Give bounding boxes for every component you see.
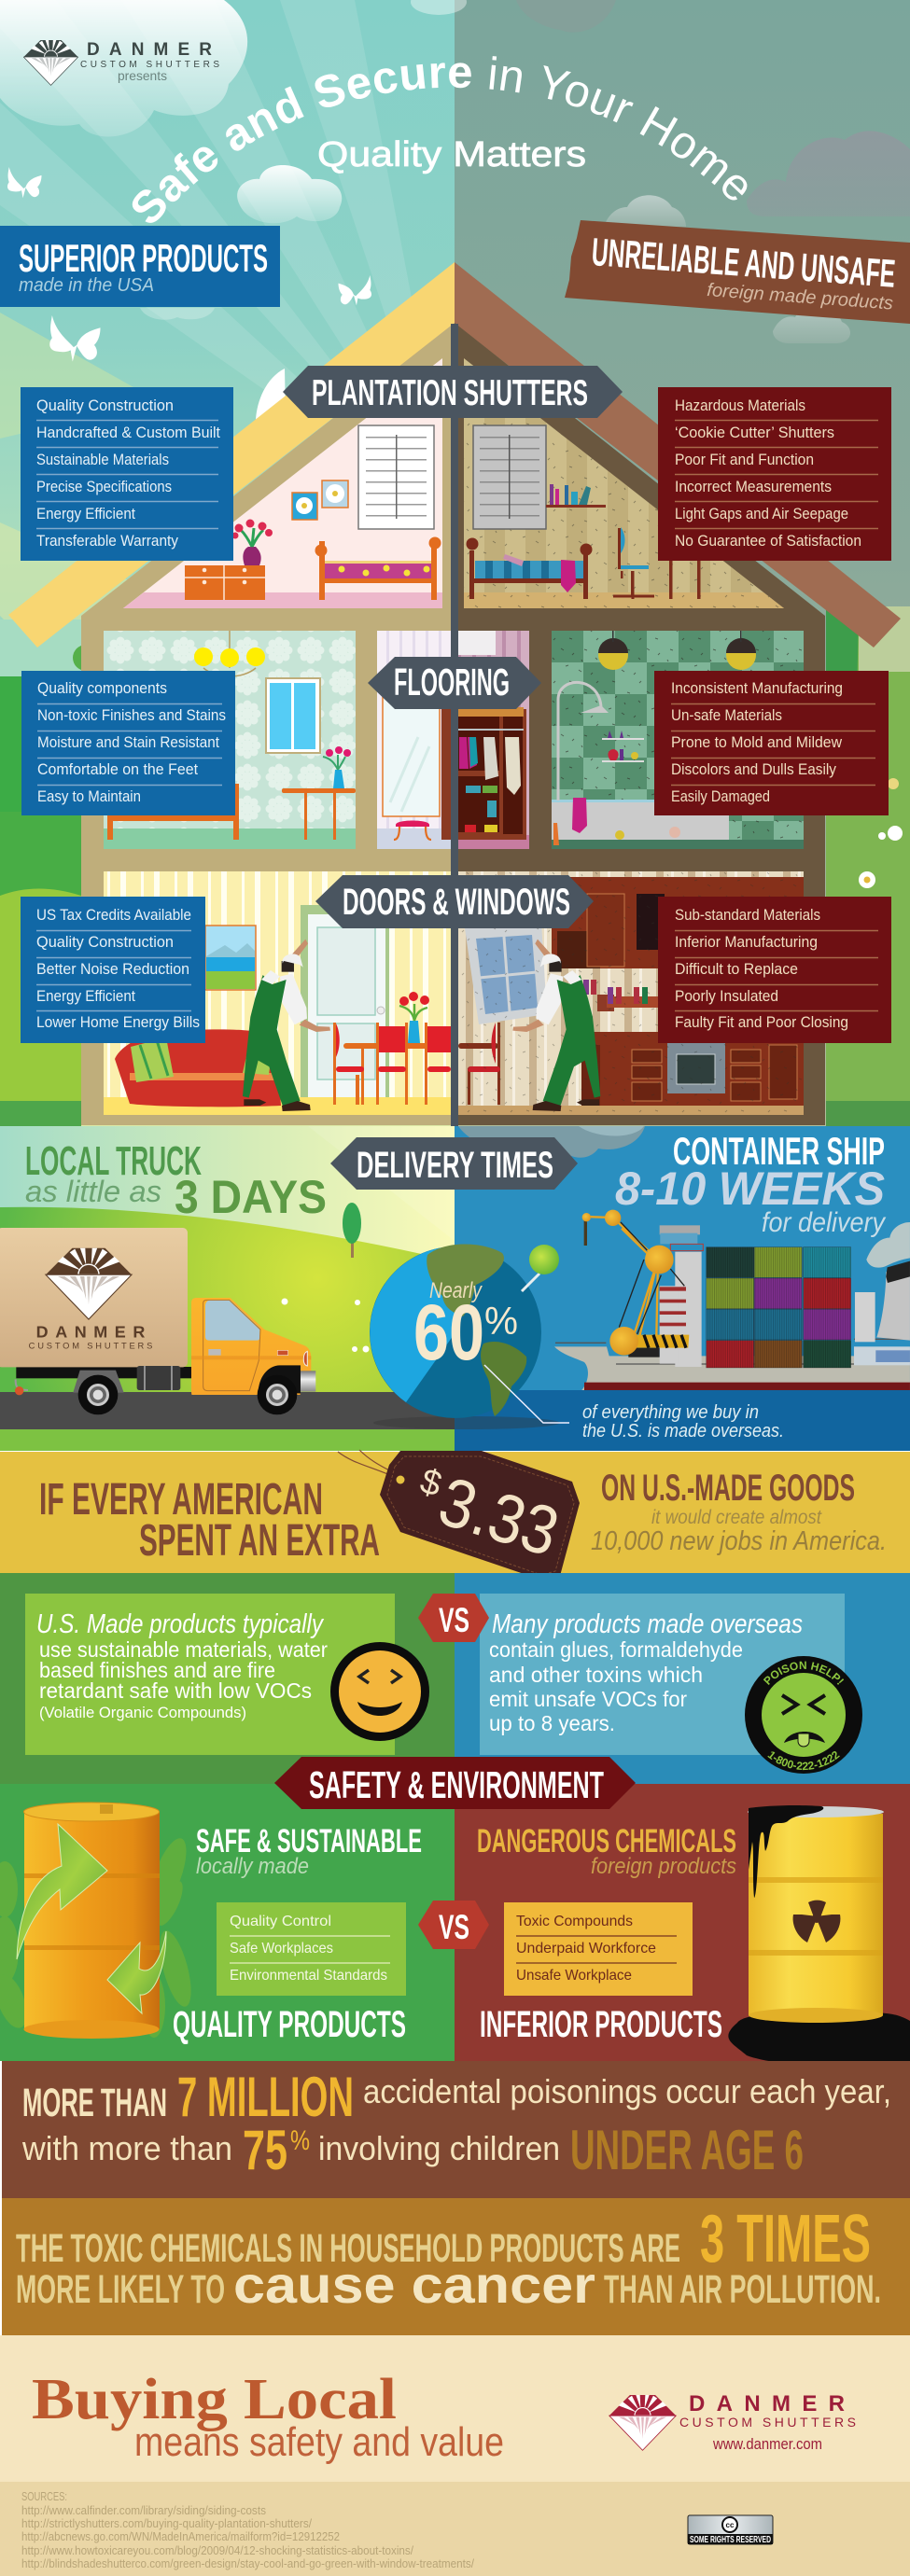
roof right	[455, 262, 901, 647]
panel: poisonings statistic: 7 MILLION	[177, 2066, 354, 2128]
list: plantation shutters benefits	[21, 387, 233, 561]
panel: us made products	[25, 1594, 395, 1755]
attic room left	[123, 358, 442, 608]
panel: sources	[0, 2482, 910, 2576]
icon: globe: %	[484, 1299, 518, 1343]
list: plantation shutters problems: Incorrect Measurements	[675, 478, 832, 495]
heading: container ship: for delivery	[762, 1207, 887, 1238]
panel: toxic chemicals statistic	[2, 2198, 910, 2335]
panel: overseas products: emit unsafe VOCs for	[489, 1687, 687, 1711]
list: doors and windows benefits	[21, 897, 205, 1043]
icon: container ship	[554, 1210, 910, 1390]
list: plantation shutters problems: Hazardous Materials	[675, 397, 805, 414]
icon: tree	[343, 1203, 361, 1258]
heading: container ship	[615, 1129, 887, 1238]
panel: VOCs comparison	[0, 1573, 910, 1784]
left landscape	[0, 1126, 455, 1451]
icon: butterflies	[7, 167, 371, 420]
list: flooring benefits: Quality components	[37, 679, 167, 697]
panel: sources: http://www.howtoxicareyou.com/blog/2009/04/12-shocking-statistics-about-toxins/	[21, 2543, 413, 2557]
list: flooring benefits: Comfortable on the Feet	[37, 760, 198, 778]
icon: truck: DANMER	[36, 1322, 145, 1341]
panel: house left half	[8, 262, 455, 1125]
list: quality factors: Environmental Standards	[230, 1968, 387, 1984]
icon: toxic barrel	[728, 1805, 910, 2068]
panel: overseas products: and other toxins which	[489, 1663, 703, 1687]
door	[301, 905, 389, 1097]
room: kitchen	[458, 871, 804, 1115]
list: doors and windows benefits: Lower Home Energy Bills	[36, 1013, 200, 1031]
icon: globe: 60	[413, 1288, 484, 1376]
wall pictures	[292, 480, 348, 520]
list: doors and windows problems: Poorly Insulated	[675, 987, 778, 1005]
callout: sixty percent caption	[484, 1365, 784, 1441]
list: flooring problems	[654, 671, 889, 815]
badge: VS: VS	[439, 1601, 469, 1639]
callout: sixty percent caption: the U.S. is made overseas.	[582, 1421, 784, 1441]
list: doors and windows problems: Faulty Fit and Poor Closing	[675, 1013, 848, 1031]
panel: sources: http://strictlyshutters.com/buying-quality-plantation-shutters/	[21, 2516, 312, 2530]
panel: plantation shutters heading: PLANTATION SHUTTERS	[312, 373, 588, 413]
icon: Danmer logo footer	[609, 2391, 856, 2453]
list: flooring problems: Inconsistent Manufacturing	[671, 679, 843, 697]
panel: flooring heading	[368, 657, 541, 709]
icon: globe: Nearly	[429, 1278, 483, 1303]
icon: creative commons badge	[688, 2515, 773, 2545]
icon: price tag: $	[415, 1461, 446, 1505]
icon: Danmer logo header: DANMER	[87, 40, 212, 60]
clouds	[0, 0, 910, 343]
icon: Danmer logo header: CUSTOM SHUTTERS	[80, 60, 219, 70]
plantation shutter grey	[473, 425, 546, 529]
list: doors and windows problems: Inferior Manufacturing	[675, 933, 818, 951]
bed left	[315, 537, 441, 600]
list: plantation shutters benefits: Energy Efficient	[36, 505, 135, 522]
list: doors and windows problems: Difficult to Replace	[675, 960, 798, 978]
icon: globe	[370, 1245, 560, 1429]
panel: house right half	[441, 262, 901, 1126]
text: inferior products: INFERIOR PRODUCTS	[480, 2004, 722, 2045]
panel: sources: SOURCES:	[21, 2489, 67, 2503]
list: doors and windows benefits: US Tax Credits Available	[36, 906, 191, 924]
text: safe and sustainable: locally made	[196, 1854, 309, 1879]
panel: poisonings statistic: MORE THAN	[22, 2081, 167, 2125]
wall frame right	[455, 323, 825, 1125]
panel: safety and environment heading: SAFETY & ENVIRONMENT	[309, 1763, 604, 1806]
panel: sources: http://www.calfinder.com/library/siding/siding-costs	[21, 2503, 266, 2517]
icon: Danmer logo footer: CUSTOM SHUTTERS	[679, 2415, 856, 2430]
list: inferior factors	[504, 1902, 693, 1996]
panel: footer buying local: Buying Local	[32, 2368, 397, 2431]
worker left	[243, 940, 330, 1111]
room: green wallpaper dining	[104, 631, 356, 849]
panel: extra spending yellow band: it would create almost	[651, 1507, 822, 1528]
list: doors and windows benefits: Energy Efficient	[36, 987, 135, 1005]
panel: us made products: U.S. Made products typically	[36, 1609, 324, 1639]
room: mirror room	[377, 631, 451, 849]
panel: extra spending yellow band: IF EVERY AMERICAN	[39, 1475, 323, 1525]
panel: delivery times heading: DELIVERY TIMES	[357, 1145, 553, 1186]
heading: local truck: 3 DAYS	[175, 1171, 327, 1223]
panel: poisonings statistic: involving children	[318, 2129, 560, 2167]
list: plantation shutters benefits: Handcrafted & Custom Built	[36, 424, 220, 441]
panel: house section sky background	[0, 0, 910, 1126]
list: inferior factors: Underpaid Workforce	[516, 1941, 656, 1956]
text: quality products: QUALITY PRODUCTS	[173, 2004, 406, 2045]
worker right	[512, 940, 600, 1111]
picture	[205, 926, 256, 990]
list: plantation shutters benefits: Precise Specifications	[36, 478, 172, 495]
icon: Danmer logo footer: www.danmer.com	[712, 2435, 822, 2453]
text: dangerous chemicals	[477, 1823, 736, 1879]
icon: poison help	[745, 1656, 862, 1774]
list: quality factors: Quality Control	[230, 1914, 331, 1929]
list: flooring problems: Easily Damaged	[671, 787, 770, 805]
panel: delivery times	[0, 1126, 910, 1451]
heading: local truck: LOCAL TRUCK	[25, 1138, 202, 1184]
panel: safety and environment	[0, 1757, 910, 2068]
panel: doors and windows heading: DOORS & WINDOWS	[343, 882, 570, 923]
right ocean	[455, 1126, 910, 1451]
list: flooring benefits: Non-toxic Finishes and Stains	[37, 706, 226, 724]
wall frame left	[81, 323, 455, 1125]
list: plantation shutters benefits: Transferable Warranty	[36, 532, 178, 550]
panel: overseas products	[480, 1594, 845, 1755]
house centre pole	[451, 324, 458, 1126]
icon: flowers	[282, 1299, 397, 1353]
list: plantation shutters benefits: Sustainable Materials	[36, 451, 169, 468]
badge: VS	[418, 1901, 489, 1949]
roof left	[8, 262, 455, 647]
panel: overseas products: up to 8 years.	[489, 1711, 615, 1735]
icon: poison help: POISON HELP!	[763, 1661, 844, 1685]
icon: truck: CUSTOM SHUTTERS	[29, 1342, 152, 1351]
list: inferior factors: Toxic Compounds	[516, 1914, 633, 1929]
panel: superior products banner	[0, 226, 280, 307]
panel: footer buying local	[0, 2335, 910, 2482]
bench	[107, 784, 239, 840]
panel: extra spending yellow band	[0, 1450, 910, 1580]
list: doors and windows benefits: Quality Construction	[36, 933, 174, 951]
text: safe and sustainable: SAFE & SUSTAINABLE	[196, 1823, 422, 1859]
icon: Danmer logo footer: DANMER	[689, 2391, 845, 2416]
dining table and chairs	[333, 992, 451, 1105]
list: plantation shutters problems: Poor Fit and Function	[675, 451, 814, 468]
icon: poison help: 1-800-222-1222	[767, 1751, 840, 1771]
panel: toxic chemicals statistic: cause cancer	[233, 2255, 595, 2314]
window	[266, 678, 320, 753]
panel: delivery times heading	[330, 1137, 578, 1190]
list: plantation shutters benefits: Quality Construction	[36, 397, 174, 414]
icon: price tag: 3.33	[430, 1462, 567, 1571]
left sunny sky	[0, 0, 455, 1126]
chair right	[458, 1023, 500, 1105]
list: flooring benefits: Easy to Maintain	[37, 787, 141, 805]
badge: VS	[418, 1594, 489, 1642]
list: doors and windows problems: Sub-standard Materials	[675, 906, 820, 924]
attic room right	[464, 358, 784, 608]
panel: plantation shutters heading	[283, 366, 623, 418]
panel: safety and environment heading	[274, 1757, 636, 1809]
heading: local truck: as little as	[25, 1175, 161, 1208]
desk chair	[613, 527, 700, 599]
panel: poisonings statistic: 75	[243, 2119, 287, 2181]
icon: Danmer logo header	[23, 40, 219, 85]
list: flooring problems: Discolors and Dulls Easily	[671, 760, 836, 778]
list: quality factors: Safe Workplaces	[230, 1941, 333, 1956]
dresser with tulips	[185, 519, 273, 600]
panel: sources: http://abcnews.go.com/WN/MadeInAmerica/mailform?id=12912252	[21, 2529, 340, 2543]
text: safe and sustainable	[196, 1823, 422, 1879]
callout: sixty percent caption: of everything we buy in	[582, 1402, 759, 1423]
icon: price tag	[338, 1450, 580, 1580]
list: plantation shutters problems: Light Gaps and Air Seepage	[675, 505, 848, 522]
list: plantation shutters problems	[658, 387, 891, 561]
panel: us made products: retardant safe with low VOCs	[39, 1678, 312, 1703]
icon: smiley	[330, 1642, 429, 1741]
list: flooring problems: Un-safe Materials	[671, 706, 782, 724]
red sofa	[115, 1029, 281, 1107]
text: dangerous chemicals: foreign products	[591, 1854, 736, 1879]
bed right	[467, 537, 592, 599]
text: dangerous chemicals: DANGEROUS CHEMICALS	[477, 1823, 736, 1859]
icon: green barrel	[0, 1803, 197, 2039]
panel: us made products: use sustainable materials, water	[39, 1637, 328, 1662]
bookshelf	[546, 484, 606, 508]
heading: local truck	[25, 1138, 327, 1223]
icon: Danmer logo header: presents	[118, 68, 167, 83]
title: Quality Matters	[317, 135, 586, 174]
icon: truck	[0, 1228, 315, 1414]
panel: overseas products: Many products made overseas	[492, 1609, 803, 1639]
panel: poisonings statistic	[2, 2061, 910, 2198]
panel: us made products: based finishes and are fire	[39, 1658, 275, 1682]
panel: superior products banner: made in the USA	[19, 275, 154, 296]
list: doors and windows benefits: Better Noise Reduction	[36, 960, 189, 978]
heading: container ship: 8-10 WEEKS	[615, 1163, 885, 1215]
badge: VS: VS	[439, 1908, 469, 1946]
right stormy sky	[455, 0, 910, 1126]
list: quality factors	[217, 1902, 406, 1996]
side table and vase	[282, 746, 356, 840]
list: inferior factors: Unsafe Workplace	[516, 1968, 632, 1984]
panel: poisonings statistic: with more than	[21, 2129, 232, 2167]
panel: unreliable and unsafe banner: foreign made products	[707, 280, 894, 314]
list: plantation shutters problems: ‘Cookie Cutter’ Shutters	[675, 424, 834, 441]
list: doors and windows problems	[658, 897, 891, 1043]
plantation shutter white	[358, 425, 434, 529]
list: plantation shutters problems: No Guarantee of Satisfaction	[675, 532, 861, 550]
panel: doors and windows heading	[315, 875, 594, 928]
panel: toxic chemicals statistic: MORE LIKELY TO	[16, 2267, 225, 2312]
panel: overseas products: contain glues, formaldehyde	[489, 1637, 743, 1662]
panel: extra spending yellow band: SPENT AN EXTRA	[139, 1516, 380, 1566]
list: flooring benefits	[21, 671, 235, 815]
title: Safe and Secure in Your Home	[133, 56, 747, 223]
icon: creative commons badge: SOME RIGHTS RESERVED	[690, 2535, 771, 2545]
panel: superior products banner: SUPERIOR PRODUCTS	[19, 236, 268, 280]
pin	[522, 1245, 559, 1291]
chandelier	[194, 631, 265, 676]
panel: flooring heading: FLOORING	[394, 661, 510, 703]
panel: poisonings statistic: %	[290, 2125, 310, 2156]
icon: creative commons badge: cc	[726, 2521, 735, 2529]
tilted window	[465, 922, 547, 1024]
panel: us made products: (Volatile Organic Compounds)	[39, 1704, 246, 1721]
room: bathroom	[552, 631, 804, 849]
list: flooring problems: Prone to Mold and Mildew	[671, 733, 843, 751]
list: flooring benefits: Moisture and Stain Resistant	[37, 733, 219, 751]
room: closet	[441, 631, 529, 849]
panel: sources: http://blindshadeshutterco.com/green-design/stay-cool-and-go-green-with-window-treatments/	[21, 2556, 474, 2570]
panel: footer buying local: means safety and value	[134, 2419, 504, 2465]
road	[0, 1392, 455, 1429]
room: living room left	[104, 871, 451, 1115]
